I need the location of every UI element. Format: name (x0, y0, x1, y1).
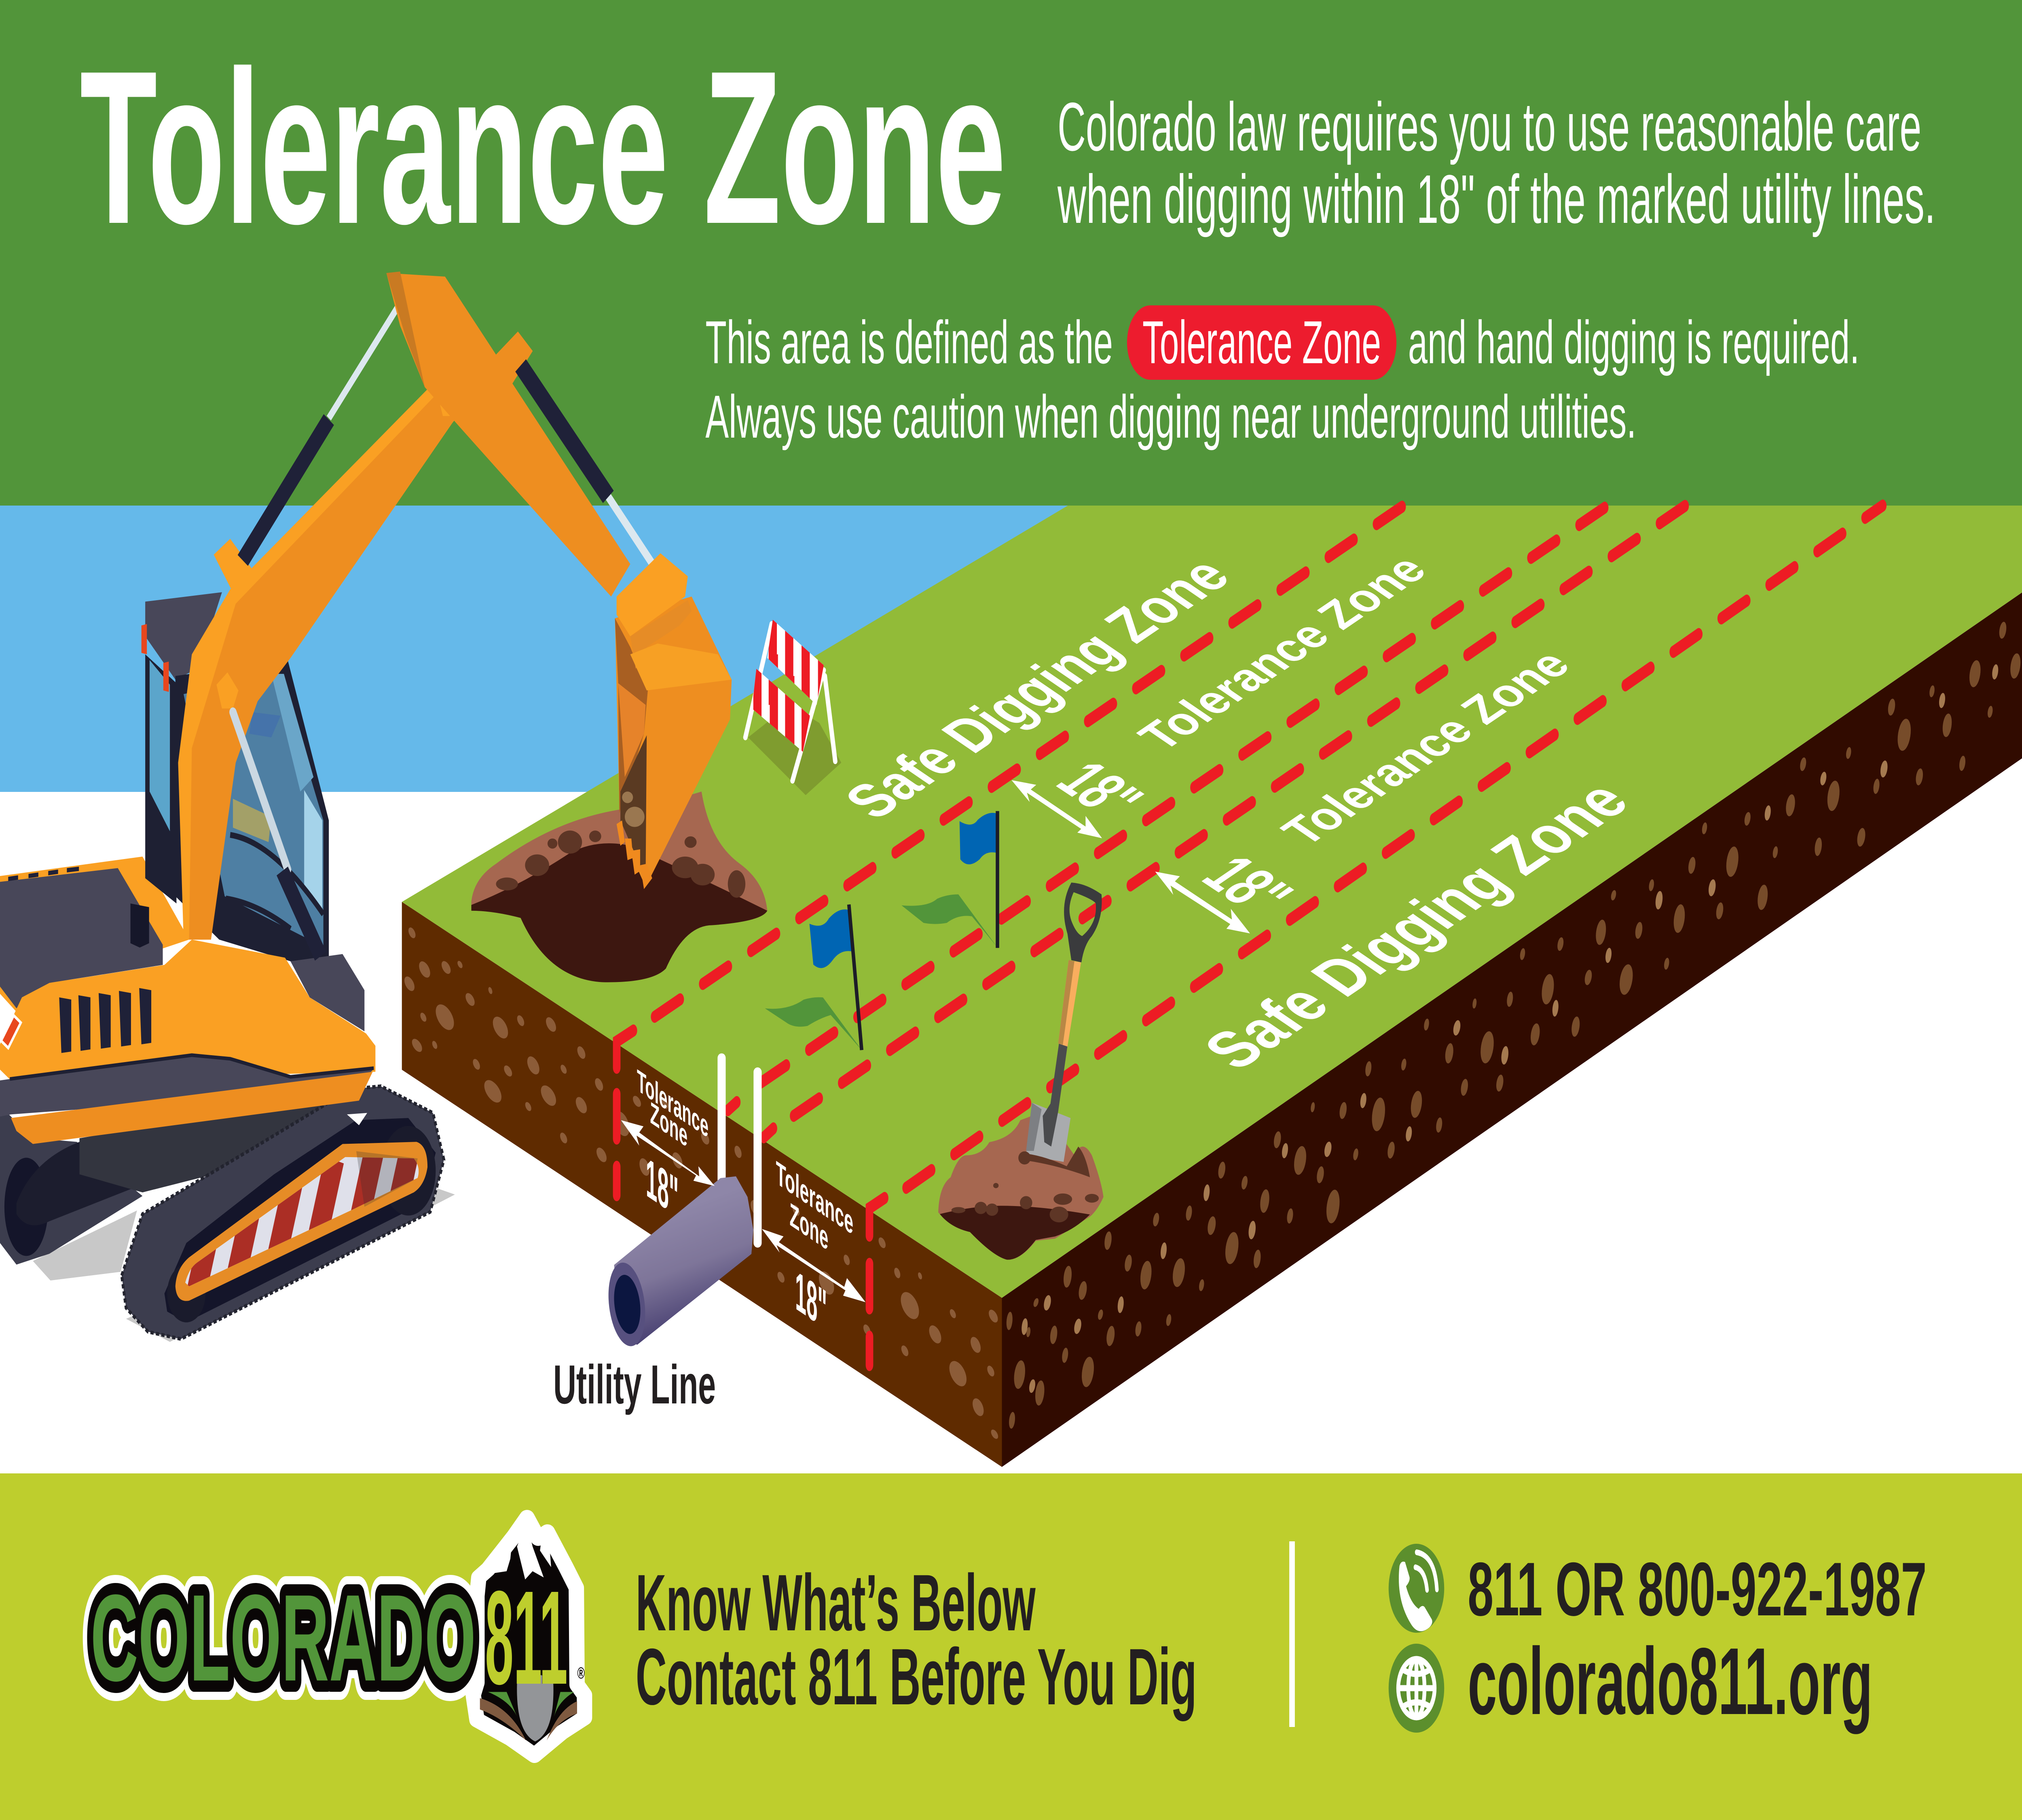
red dashed line 3 (764, 506, 1686, 1137)
soil label right tolerance: Tolerance (776, 1154, 853, 1242)
shovel (1018, 882, 1102, 1177)
phone number: 811 OR 800-922-1987 (1468, 1547, 1927, 1632)
front soil face (402, 902, 1002, 1467)
excavator (0, 271, 732, 1342)
red pill highlight: Tolerance Zone (1142, 308, 1381, 376)
ground label: Tolerance Zone upper: Tolerance Zone (1127, 547, 1438, 758)
cab (142, 592, 329, 961)
red dashed line 4 with corner (869, 506, 1883, 1365)
globe icon (1389, 1644, 1444, 1733)
small dirt mound (938, 1111, 1104, 1260)
ground top surface (402, 506, 2022, 1298)
rear crawler track (0, 1106, 142, 1265)
side soil speckles (1007, 601, 2020, 1448)
registered mark: ® (577, 1664, 585, 1682)
arm hydraulic cylinder (520, 366, 655, 568)
boom hydraulic cylinder (243, 308, 398, 561)
large dirt pile and hole (472, 791, 767, 982)
flag marker two (901, 811, 998, 948)
purple utility pipe (604, 1177, 753, 1349)
soil label right 18 inches: 18" (795, 1259, 827, 1342)
website: colorado811.org (1468, 1628, 1873, 1734)
utility markers and pipe (604, 1058, 865, 1349)
legal intro text: Colorado law requires you to use reasonable care (1058, 89, 1921, 165)
side soil face (1002, 593, 2022, 1467)
undercarriage (80, 1091, 356, 1192)
ground label: 18 inches upper: 18" (1042, 751, 1159, 829)
logo wordmark middle: COLORADO (91, 1569, 476, 1707)
title: Tolerance Zone (80, 25, 1006, 269)
utility line label: Utility Line (553, 1354, 716, 1416)
bucket front cylinder (233, 712, 321, 956)
soil label left tolerance: Tolerance (637, 1063, 709, 1145)
exhaust stack (131, 904, 149, 948)
legal intro text: when digging within 18" of the marked utility lines. (1057, 161, 1935, 238)
logo wordmark outer: COLORADO (91, 1569, 476, 1707)
ground block (402, 506, 2022, 1467)
front crawler track (122, 1086, 444, 1339)
white marker post left (717, 1058, 726, 1182)
track frame with warning stripes (176, 1142, 428, 1301)
definition text (705, 305, 1859, 451)
front soil speckles (404, 921, 998, 1441)
excavator engine cover (0, 857, 189, 1012)
barricade (745, 611, 841, 795)
red dashed line 2 (728, 506, 1608, 1110)
soil arrow right (762, 1229, 865, 1302)
ground double arrows (1011, 780, 1250, 933)
red dashed line 1 with corner (617, 506, 1404, 1195)
phone icon (1389, 1544, 1444, 1633)
footer band (0, 1473, 2022, 1820)
logo wordmark: COLORADO (91, 1569, 476, 1707)
footer tagline (636, 1558, 1197, 1721)
definition text: Always use caution when digging near underground utilities. (705, 383, 1636, 451)
arm (386, 271, 630, 597)
boom (178, 367, 467, 940)
logo (91, 1517, 585, 1755)
legal intro text (1057, 89, 1935, 238)
flag marker one (765, 904, 862, 1050)
soil label left 18 inches: 18" (646, 1145, 679, 1229)
engine vents (59, 988, 151, 1053)
soil arrow left (621, 1120, 715, 1186)
definition text: This area is defined as the (705, 308, 1113, 376)
logo shield and mountain (473, 1517, 584, 1755)
logo 811: 811 (485, 1564, 568, 1712)
ground label: Safe Digging Zone upper: Safe Digging Zone (831, 548, 1244, 828)
footer tagline: Know What’s Below (636, 1558, 1036, 1647)
arrow lower (1155, 872, 1250, 933)
ground label: Tolerance Zone lower: Tolerance Zone (1270, 642, 1581, 853)
ground label: Safe Digging Zone lower: Safe Digging Zone (1189, 771, 1643, 1080)
main body (0, 940, 375, 1144)
ground label: 18 inches lower: 18" (1187, 845, 1309, 926)
header band (0, 0, 2022, 506)
soil label left tolerance: Zone (650, 1095, 687, 1154)
soil label right tolerance: Zone (789, 1196, 828, 1258)
sky band (0, 506, 1112, 792)
bucket (615, 553, 732, 889)
ground shadow (33, 1189, 455, 1342)
white marker post right (753, 1072, 762, 1243)
arrow upper (1011, 780, 1102, 838)
footer tagline: Contact 811 Before You Dig (636, 1632, 1197, 1721)
definition text: and hand digging is required. (1408, 308, 1859, 376)
